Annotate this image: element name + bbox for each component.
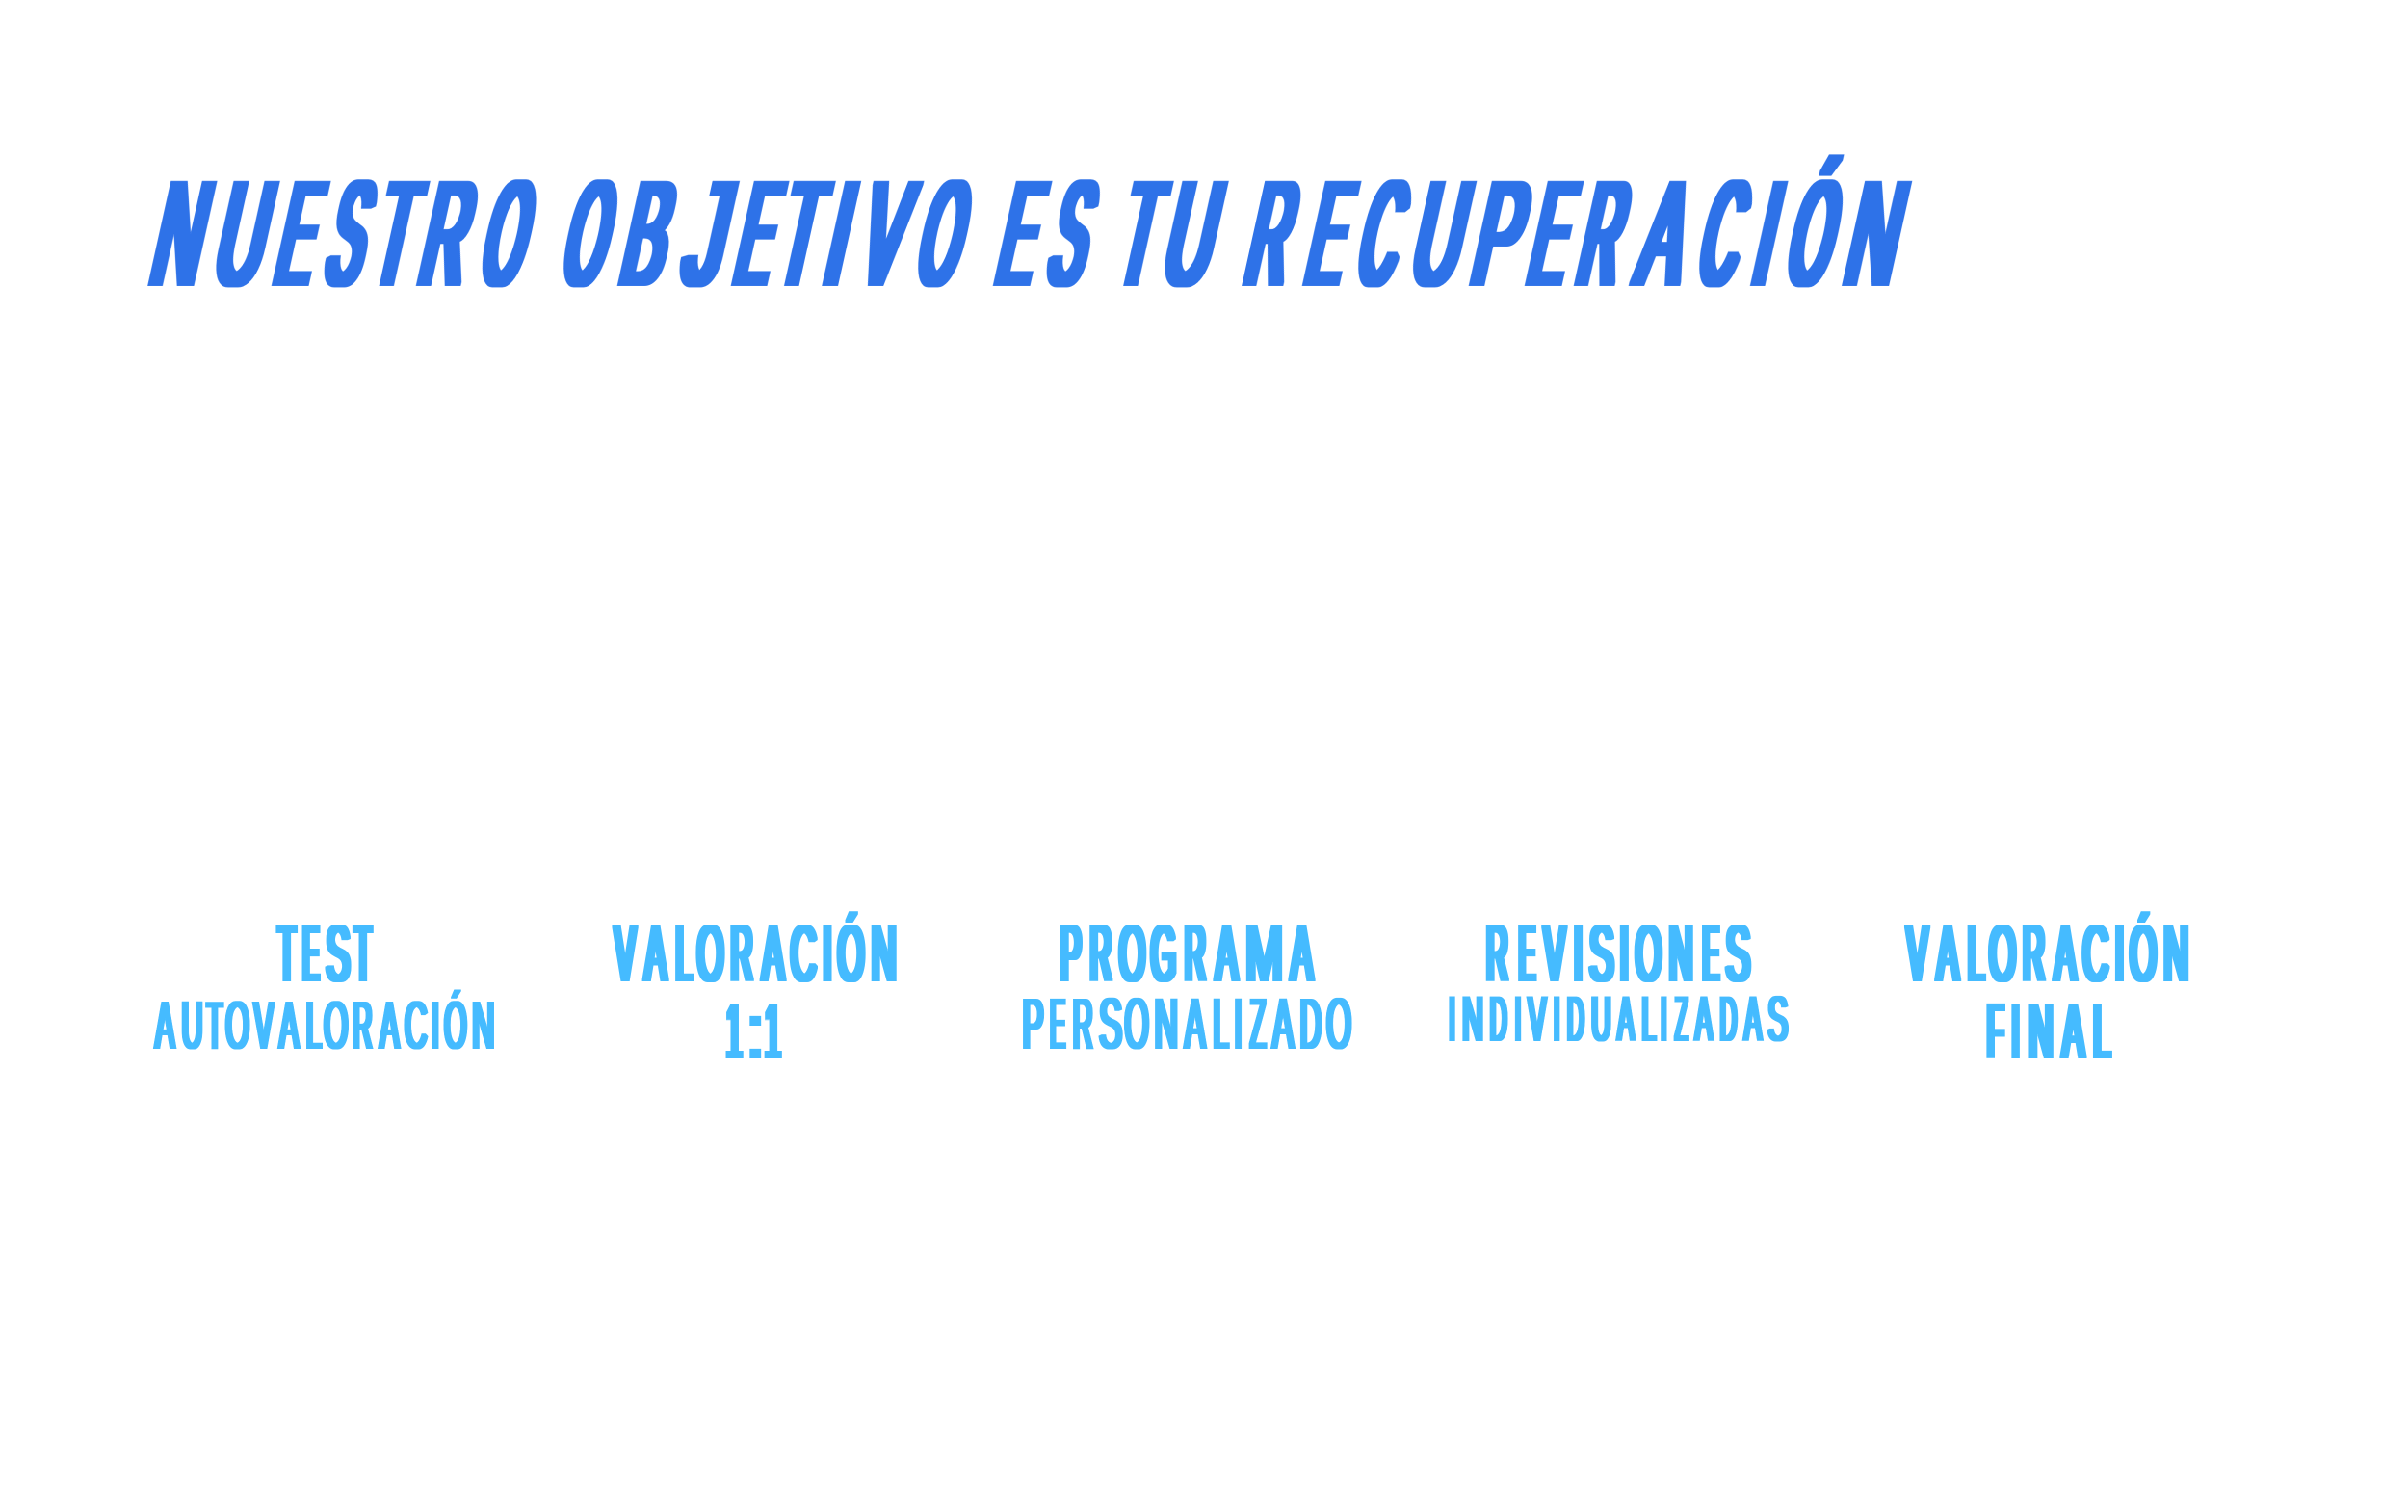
step 1: test autovaloración: L: [306, 988, 322, 1063]
step 5: valoración final: C: [2082, 910, 2108, 998]
step 3: programa personalizado: D: [1300, 984, 1322, 1063]
step 4: revisiones individualizadas: [1450, 910, 1788, 1054]
step 2: valoración 1:1: O: [697, 910, 723, 998]
step 1: test autovaloración: [155, 910, 494, 1063]
title: R: [1236, 151, 1311, 316]
title: T: [363, 151, 433, 316]
title: V: [849, 151, 927, 316]
title: U: [1152, 151, 1236, 316]
step 2: valoración 1:1: [615, 910, 897, 1074]
step 4: revisiones individualizadas: D: [1490, 984, 1507, 1054]
step 1: test autovaloración: V: [254, 988, 274, 1063]
step 3: programa personalizado: [1023, 910, 1351, 1063]
step 4: revisiones individualizadas: L: [1642, 984, 1656, 1054]
step 5: valoración final: N: [2029, 988, 2054, 1074]
step 3: programa personalizado: S: [1099, 984, 1122, 1063]
title: B: [611, 151, 689, 316]
title: U: [203, 151, 287, 316]
step 2: valoración 1:1: L: [676, 910, 693, 998]
step 4: revisiones individualizadas: R: [1486, 910, 1507, 998]
title: Ó: [1777, 151, 1854, 316]
step 4: revisiones individualizadas: E: [1519, 910, 1535, 998]
step 4: revisiones individualizadas: E: [1703, 910, 1718, 998]
title: O: [907, 151, 983, 316]
step 1: test autovaloración: Ó: [444, 988, 467, 1063]
step 3: programa personalizado: E: [1050, 984, 1065, 1063]
step 1: test autovaloración: R: [353, 988, 372, 1063]
step 3: programa personalizado: R: [1185, 910, 1206, 998]
step 3: programa personalizado: R: [1090, 910, 1112, 998]
step 5: valoración final: A: [2055, 910, 2077, 998]
title: C: [1347, 151, 1421, 316]
text: N: [472, 988, 494, 1063]
title: I: [1742, 151, 1795, 316]
step 3: programa personalizado: I: [1235, 984, 1242, 1063]
step 3: programa personalizado: P: [1023, 984, 1044, 1063]
step 3: programa personalizado: A: [1272, 984, 1294, 1063]
title: J: [671, 151, 747, 316]
step 1: test autovaloración: A: [380, 988, 399, 1063]
step 4: revisiones individualizadas: A: [1744, 984, 1762, 1054]
step 1: test autovaloración: E: [302, 910, 319, 998]
step 4: revisiones individualizadas: Z: [1675, 984, 1688, 1054]
title: T: [1108, 151, 1177, 316]
title: S: [316, 151, 386, 316]
step 3: programa personalizado: G: [1151, 910, 1176, 998]
step 1: test autovaloración: T: [207, 988, 222, 1063]
title: U: [1400, 151, 1483, 316]
step 5: valoración final: I: [2115, 910, 2124, 998]
title: P: [1461, 151, 1542, 316]
text: O: [1326, 984, 1351, 1063]
step 3: programa personalizado: A: [1216, 910, 1238, 998]
step 2: valoración 1:1: Ó: [838, 910, 864, 998]
title: T: [768, 151, 839, 316]
text: N: [2163, 910, 2188, 998]
step 1: test autovaloración: T: [354, 910, 372, 998]
title: E: [1296, 151, 1367, 316]
title: I: [814, 151, 870, 316]
title: O: [553, 151, 629, 316]
step 3: programa personalizado: O: [1119, 910, 1145, 998]
step 4: revisiones individualizadas: O: [1636, 910, 1662, 998]
step 4: revisiones individualizadas: N: [1462, 984, 1483, 1054]
step 4: revisiones individualizadas: S: [1726, 910, 1750, 998]
step 4: revisiones individualizadas: D: [1720, 984, 1737, 1054]
step 2: valoración 1:1: :: [747, 988, 764, 1074]
step 3: programa personalizado: O: [1125, 984, 1149, 1063]
step 2: valoración 1:1: I: [823, 910, 832, 998]
title: N: [141, 151, 224, 316]
step 1: test autovaloración: A: [279, 988, 299, 1063]
step 2: valoración 1:1: R: [731, 910, 752, 998]
step 1: test autovaloración: U: [182, 988, 202, 1063]
step 5: valoración final: R: [2023, 910, 2045, 998]
step 1: test autovaloración: O: [225, 988, 249, 1063]
step 4: revisiones individualizadas: I: [1620, 910, 1629, 998]
title: R: [1567, 151, 1642, 316]
step 5: valoración final: A: [2062, 988, 2084, 1074]
step 2: valoración 1:1: A: [763, 910, 784, 998]
title: O: [471, 151, 547, 316]
step 1: test autovaloración: C: [405, 988, 428, 1063]
step 3: programa personalizado: A: [1291, 910, 1313, 998]
title: E: [1519, 151, 1589, 316]
step 5: valoración final: F: [1987, 988, 2003, 1074]
step 2: valoración 1:1: C: [791, 910, 817, 998]
step 5: valoración final: V: [1907, 910, 1927, 998]
step 1: test autovaloración: I: [431, 988, 439, 1063]
step 3: programa personalizado: R: [1073, 984, 1093, 1063]
text: S: [1767, 984, 1788, 1054]
title: R: [409, 151, 488, 316]
step 1: test autovaloración: O: [324, 988, 348, 1063]
title: E: [725, 151, 795, 316]
step 2: valoración 1:1: A: [645, 910, 667, 998]
step 4: revisiones individualizadas: I: [1515, 984, 1521, 1054]
text: N: [872, 910, 897, 998]
title: E: [987, 151, 1058, 316]
step 4: revisiones individualizadas: I: [1574, 910, 1583, 998]
step 3: programa personalizado: M: [1245, 910, 1283, 998]
step 3: programa personalizado: P: [1060, 910, 1082, 998]
step 4: revisiones individualizadas: U: [1591, 984, 1611, 1054]
step 4: revisiones individualizadas: V: [1529, 984, 1546, 1054]
step 5: valoración final: A: [1937, 910, 1959, 998]
title: E: [266, 151, 336, 316]
step 2: valoración 1:1: 1: [726, 988, 742, 1074]
step 4: revisiones individualizadas: A: [1695, 984, 1713, 1054]
step 2: valoración 1:1: V: [615, 910, 636, 998]
step 1: test autovaloración: A: [155, 988, 174, 1063]
step 5: valoración final: L: [2093, 988, 2110, 1074]
step 2: valoración 1:1: 1: [765, 988, 780, 1074]
step 5: valoración final: L: [1968, 910, 1984, 998]
step 3: programa personalizado: L: [1214, 984, 1229, 1063]
step 4: revisiones individualizadas: I: [1450, 984, 1454, 1054]
step 3: programa personalizado: N: [1155, 984, 1178, 1063]
step 4: revisiones individualizadas: A: [1617, 984, 1635, 1054]
title: C: [1688, 151, 1762, 316]
step 5: valoración final: Ó: [2130, 910, 2157, 998]
step 3: programa personalizado: Z: [1250, 984, 1266, 1063]
step 4: revisiones individualizadas: N: [1669, 910, 1693, 998]
step 4: revisiones individualizadas: I: [1554, 984, 1559, 1054]
step 1: test autovaloración: S: [327, 910, 350, 998]
step 3: programa personalizado: A: [1185, 984, 1206, 1063]
title: N: [1834, 151, 1920, 316]
step 4: revisiones individualizadas: S: [1589, 910, 1613, 998]
title: A: [1627, 151, 1706, 316]
step 5: valoración final: O: [1989, 910, 2016, 998]
title: [141, 151, 1920, 316]
step 4: revisiones individualizadas: V: [1544, 910, 1565, 998]
step 1: test autovaloración: T: [278, 910, 296, 998]
step 4: revisiones individualizadas: D: [1567, 984, 1584, 1054]
step 4: revisiones individualizadas: I: [1661, 984, 1666, 1054]
step 5: valoración final: [1907, 910, 2188, 1074]
title: S: [1038, 151, 1109, 316]
step 5: valoración final: I: [2012, 988, 2019, 1074]
